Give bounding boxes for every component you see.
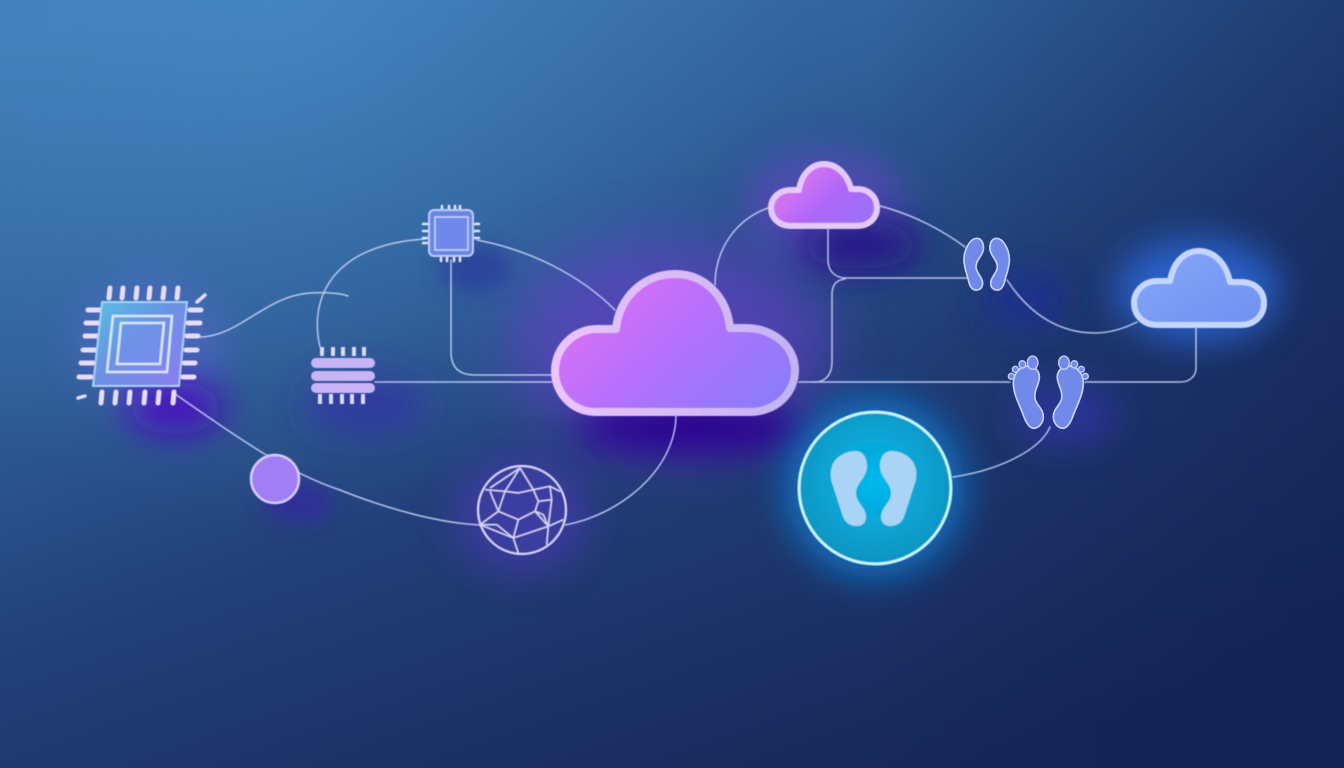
- toes: [1008, 356, 1088, 379]
- ambient glows and shadows: [75, 150, 1280, 578]
- small chip body: [429, 210, 473, 256]
- icon: large footprints with toes: [1008, 356, 1088, 428]
- stacked chip bars: [311, 358, 375, 393]
- badge footprints: [831, 451, 916, 526]
- chip body: [93, 302, 187, 386]
- icon: blue cloud: [1134, 251, 1264, 325]
- icon: stacked bar chip: [311, 347, 375, 404]
- icon: wireframe sphere: [478, 466, 566, 554]
- icon: small processor chip: [423, 206, 479, 261]
- small chip pins: [423, 206, 479, 261]
- icon: cyan footprint badge: [799, 412, 951, 564]
- chip pins: [78, 288, 205, 403]
- icon: large processor chip: [78, 288, 205, 403]
- small chip core: [435, 217, 468, 250]
- stacked chip pins: [320, 347, 364, 404]
- connector lines: [175, 206, 1196, 525]
- icon: pink cloud: [771, 164, 877, 226]
- icon: small footprints: [964, 238, 1009, 290]
- icon: main cloud: [555, 274, 795, 412]
- chip inner squares: [107, 316, 172, 372]
- icon: purple node: [251, 455, 299, 503]
